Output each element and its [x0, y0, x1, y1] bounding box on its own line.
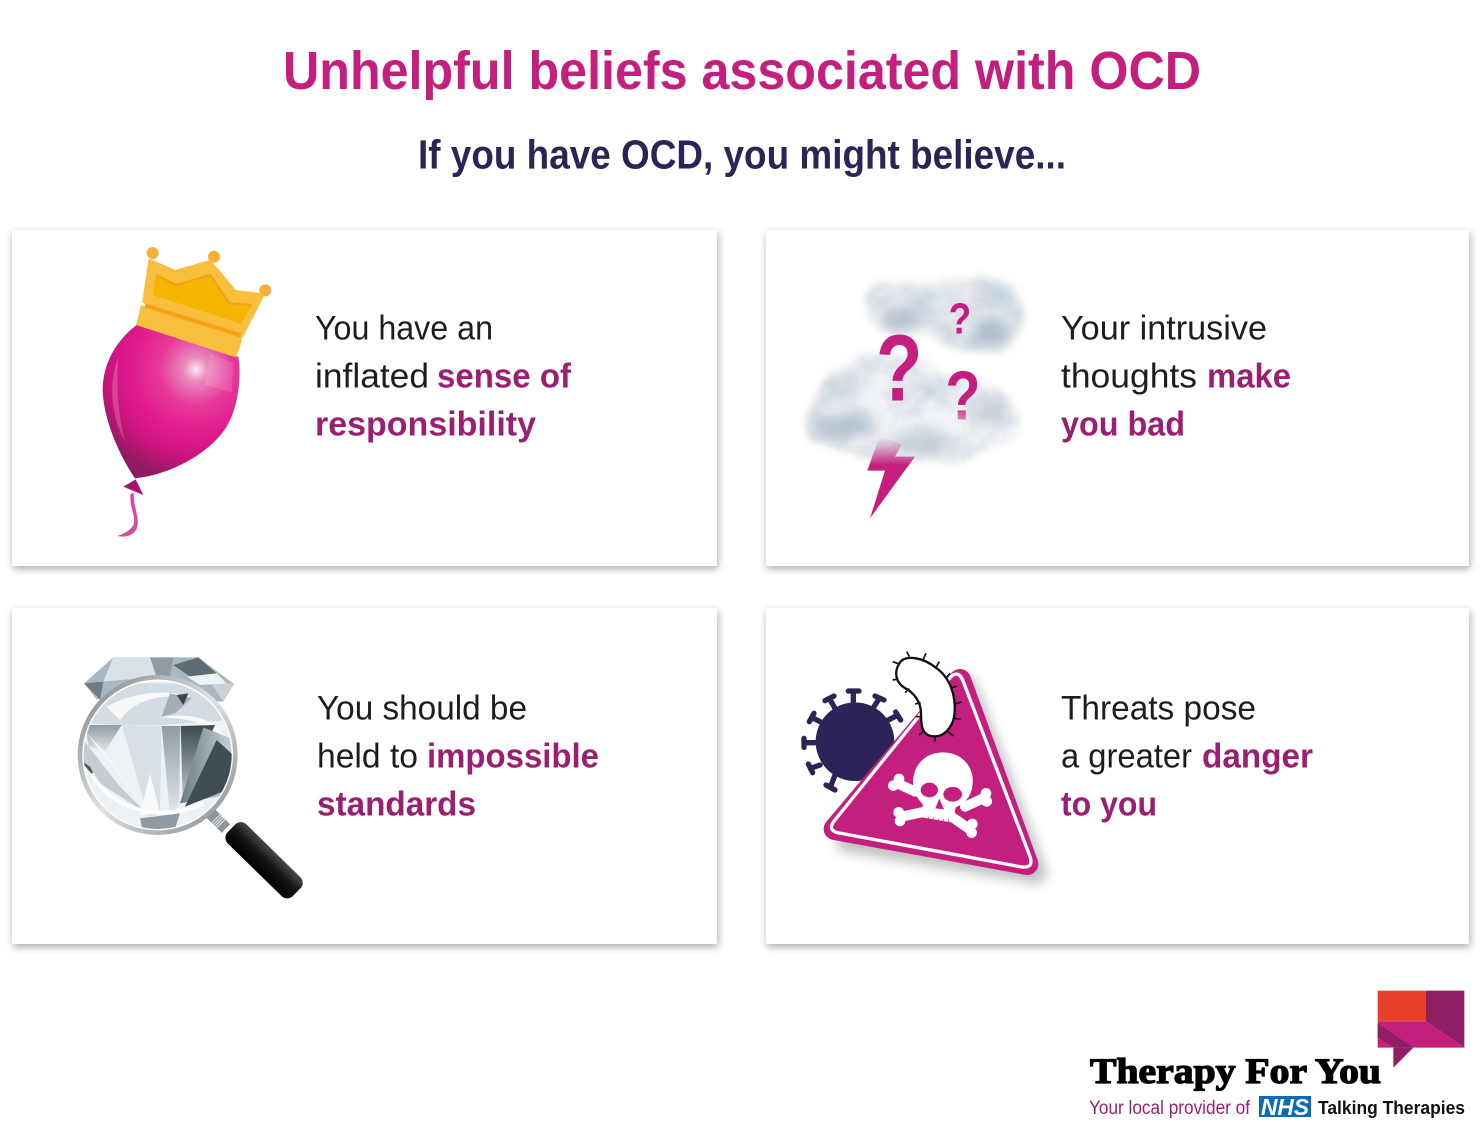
question marks: ?	[949, 295, 971, 343]
text: threats pose a greater danger to you: a greater	[1061, 738, 1192, 776]
text: held to impossible standards: You should be	[317, 690, 527, 728]
text: inflated sense of responsibility: sense of	[437, 358, 572, 396]
text: inflated sense of responsibility	[315, 310, 572, 444]
question marks: ?	[876, 316, 922, 422]
icon: warning triangle with skull, virus and bacterium	[804, 652, 1037, 873]
text: inflated sense of responsibility: responsibility	[315, 406, 536, 444]
text: inflated sense of responsibility: inflated	[315, 358, 429, 396]
text: intrusive thoughts make you bad: thoughts	[1061, 358, 1197, 396]
text: intrusive thoughts make you bad: Your intrusive	[1061, 310, 1267, 348]
virus	[804, 691, 901, 790]
bacterium	[893, 652, 962, 742]
panel: inflated sense of responsibility	[12, 230, 717, 566]
logo tagline: Your local provider of	[1089, 1098, 1251, 1119]
logo service name: Talking Therapies	[1318, 1098, 1465, 1118]
text: inflated sense of responsibility: You have an	[315, 310, 493, 348]
panel: intrusive thoughts	[766, 230, 1469, 566]
question marks	[876, 295, 980, 435]
subtitle: If you have OCD, you might believe...	[418, 132, 1066, 178]
logo: Therapy For You	[1089, 991, 1465, 1120]
icon: storm clouds with question marks and lightning	[810, 279, 1025, 518]
text: threats pose a greater danger to you: Threats pose	[1061, 690, 1256, 728]
text: held to impossible standards: held to	[317, 738, 418, 776]
text: held to impossible standards: impossible	[427, 738, 599, 776]
text: threats pose a greater danger to you	[1061, 690, 1313, 824]
panel: impossible standards	[12, 608, 717, 944]
question marks: ?	[945, 356, 980, 435]
logo name: Therapy For You	[1090, 1051, 1381, 1091]
text: intrusive thoughts make you bad: you bad	[1061, 406, 1185, 444]
text: threats pose a greater danger to you: danger	[1202, 738, 1313, 776]
icon: diamond under a magnifying glass	[77, 657, 306, 902]
text: threats pose a greater danger to you: to you	[1061, 786, 1157, 824]
panel: threats pose a greater danger	[766, 608, 1469, 944]
title: Unhelpful beliefs associated with OCD	[283, 41, 1201, 101]
NHS badge: NHS	[1261, 1094, 1310, 1120]
text: held to impossible standards: standards	[317, 786, 476, 824]
icon: balloon wearing a crown	[103, 247, 271, 537]
text: intrusive thoughts make you bad	[1061, 310, 1291, 444]
skull and crossbones	[888, 752, 992, 838]
handle	[211, 813, 306, 902]
text: intrusive thoughts make you bad: make	[1207, 358, 1291, 396]
text: held to impossible standards	[317, 690, 599, 824]
warning triangle	[835, 680, 1027, 864]
icon: speech bubble	[1378, 991, 1464, 1068]
